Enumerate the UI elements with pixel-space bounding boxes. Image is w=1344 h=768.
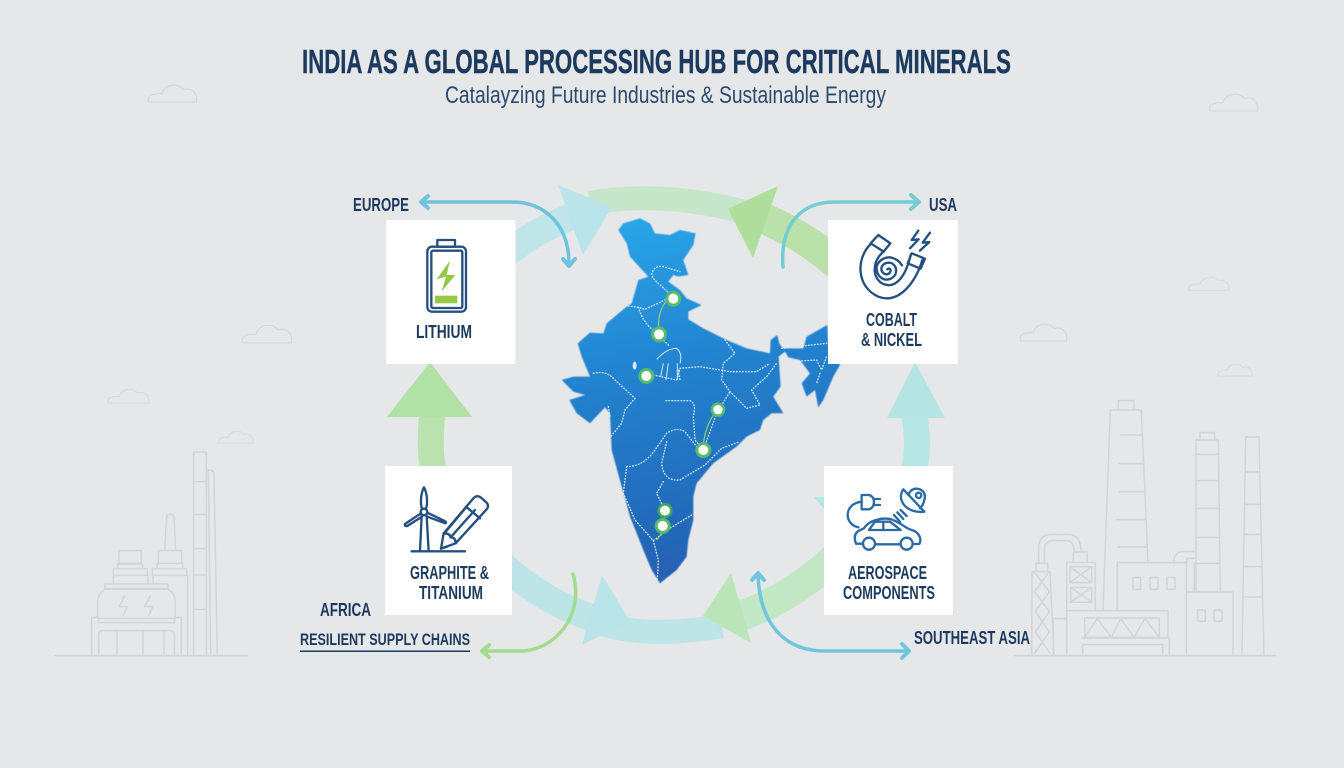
- icon: magnet: [860, 231, 930, 298]
- arrowhead: right teal: [887, 362, 945, 418]
- dotted state routes: [593, 266, 827, 580]
- icon: car, plug and dish: [848, 489, 925, 550]
- title: INDIA AS A GLOBAL PROCESSING HUB FOR CRITICAL MINERALS: [302, 43, 1011, 80]
- decorative clouds: [108, 85, 1258, 443]
- map of India: [562, 218, 840, 583]
- arrowhead: bottom green: [703, 573, 751, 643]
- panel: lithium: [386, 220, 516, 364]
- ring segment: bottom-left teal: [500, 562, 605, 622]
- label: aerospace components: AEROSPACE: [848, 563, 927, 583]
- subtitle: Catalayzing Future Industries & Sustainable Energy: [445, 82, 886, 109]
- ring segment: right teal: [913, 410, 917, 475]
- label: cobalt and nickel: [861, 310, 922, 350]
- label: cobalt and nickel: & NICKEL: [861, 330, 922, 350]
- arrowhead: left green: [387, 362, 472, 417]
- circular flow ring: [387, 185, 945, 645]
- arrowhead: hidden teal corner: [814, 497, 830, 516]
- panel: aerospace components: [824, 466, 953, 615]
- ring segment: bottom-right green: [735, 555, 838, 618]
- region label: USA: USA: [929, 195, 957, 215]
- ring segment: top-left teal: [500, 212, 585, 260]
- arrowhead: bottom teal: [582, 575, 630, 645]
- ring segment: bottom teal: [590, 620, 722, 632]
- panel: cobalt and nickel: [828, 220, 958, 364]
- arrow: USA trade link: [783, 195, 919, 267]
- label: aerospace components: [843, 563, 935, 603]
- panel: graphite and titanium: [385, 466, 512, 615]
- ring segment: top green: [590, 198, 745, 212]
- arrow: Southeast Asia trade link: [752, 573, 909, 658]
- left background factory: [55, 452, 247, 656]
- arrow: Europe trade link: [421, 196, 575, 266]
- region label: Southeast Asia: SOUTHEAST ASIA: [914, 628, 1030, 648]
- label: graphite and titanium: GRAPHITE &: [410, 563, 489, 583]
- resilient supply chains caption: RESILIENT SUPPLY CHAINS: [300, 630, 470, 649]
- arrow: Africa trade link: [482, 574, 576, 657]
- label: cobalt and nickel: COBALT: [866, 310, 917, 330]
- label: aerospace components: COMPONENTS: [843, 583, 935, 603]
- label: graphite and titanium: [410, 563, 489, 603]
- ring segment: top-right green: [755, 215, 838, 265]
- label: graphite and titanium: TITANIUM: [419, 583, 483, 603]
- icon: battery: [427, 240, 466, 312]
- map outline: [562, 218, 840, 583]
- processing hub markers: [638, 291, 725, 534]
- right background factory: [1015, 401, 1275, 656]
- region label: Europe: EUROPE: [353, 195, 409, 215]
- label: lithium: LITHIUM: [416, 322, 472, 342]
- region label: Africa: AFRICA: [320, 600, 371, 620]
- ring segment: left green: [431, 410, 434, 475]
- arrowhead: top teal: [558, 185, 612, 255]
- arrowhead: top green: [728, 186, 778, 258]
- icon: wind turbine and pencil: [405, 487, 488, 551]
